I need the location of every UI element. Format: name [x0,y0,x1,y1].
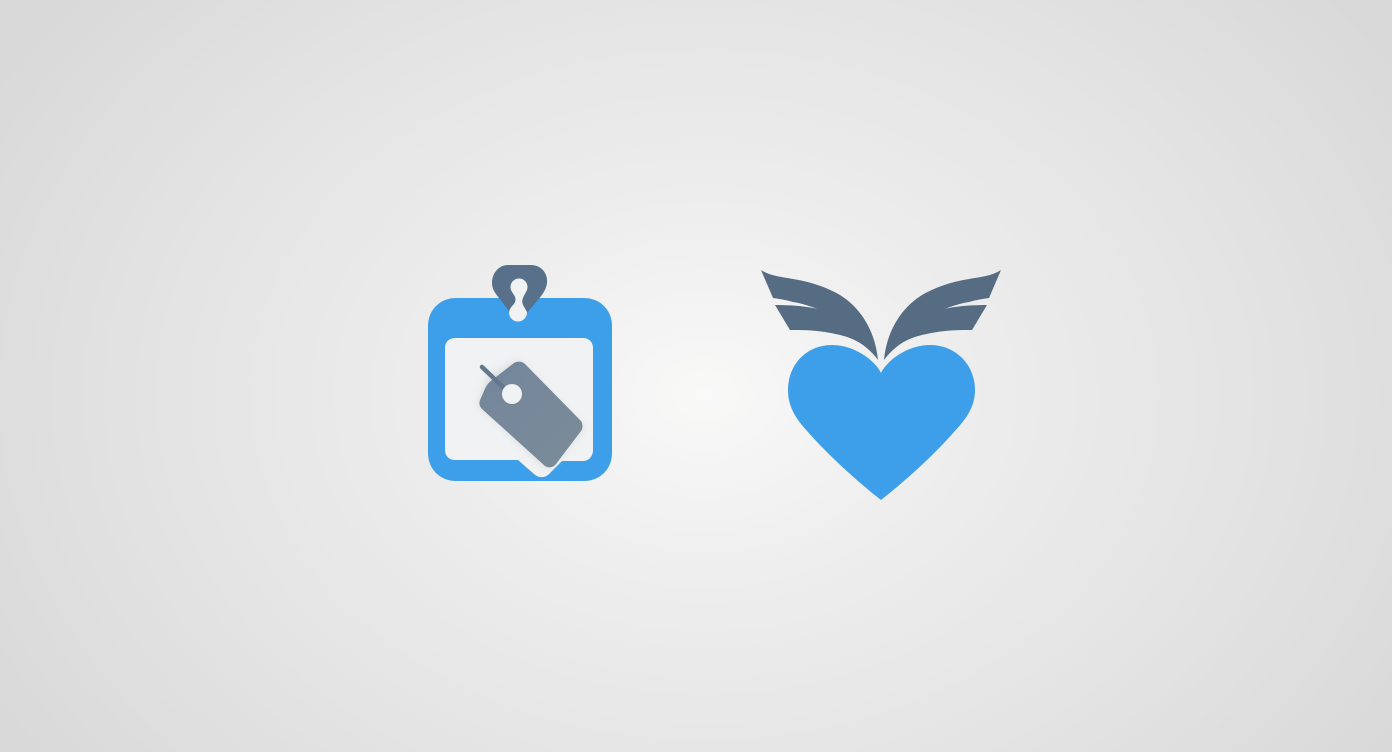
right wing [884,270,1001,360]
icon: price tag in frame [428,265,612,481]
tag body [479,362,582,467]
frame [428,298,612,481]
icon: winged heart [761,270,1001,500]
pin keyhole [509,278,528,322]
pin [492,265,547,313]
tag shadow [478,360,585,470]
heart [788,345,975,500]
left wing [761,270,878,360]
frame inner panel [445,338,593,477]
tag eyelet [502,384,522,404]
tag string [482,367,506,390]
